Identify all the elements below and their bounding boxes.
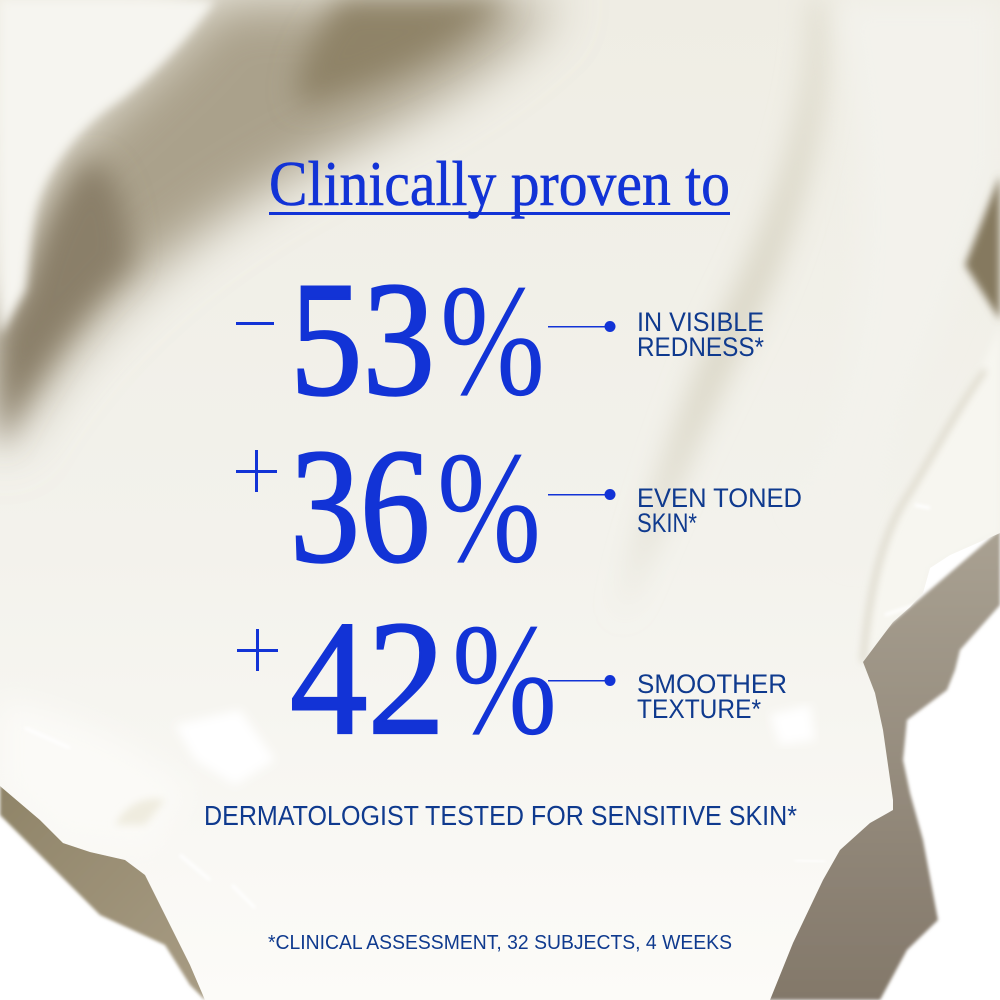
stat: plus 36 percent even toned skin: EVEN TONED [637,483,802,513]
title: Clinically proven to [269,148,730,219]
stat: plus 36 percent even toned skin: % [437,418,541,596]
stat: minus 53 percent in visible redness: % [440,251,545,429]
top right light fold [969,30,970,31]
stat: plus 42 percent smoother texture: TEXTURE* [637,694,761,724]
flap crease [863,370,985,662]
stat: minus 53 percent in visible redness [236,249,764,430]
shadow: lower left [0,780,210,1000]
shadow: right side [760,530,1000,1000]
stat: minus 53 percent in visible redness: IN VISIBLE [637,307,764,337]
stat: minus 53 percent in visible redness: REDNESS* [637,332,764,362]
top left flap [0,0,215,335]
stat: plus 36 percent even toned skin: SKIN* [637,508,697,538]
small fold [115,799,165,825]
subheading: dermatologist tested: DERMATOLOGIST TESTED FOR SENSITIVE SKIN* [204,800,797,831]
stat: minus 53 percent in visible redness: 53 [290,249,435,430]
stat: plus 42 percent smoother texture: % [452,590,557,768]
top right dark notch [965,175,1000,320]
stat: plus 36 percent even toned skin: 36 [290,416,430,597]
footnote: *CLINICAL ASSESSMENT, 32 SUBJECTS, 4 WEEKS [268,932,732,954]
right flap [868,626,890,654]
highlights [180,712,270,780]
stat: plus 42 percent smoother texture: SMOOTHER [637,669,787,699]
stat: plus 42 percent smoother texture [237,588,787,769]
shade: top left diagonal band [0,0,560,460]
lower left bright ridge [2,788,94,853]
stat: plus 36 percent even toned skin [236,416,802,597]
crease: long fold on the right [634,7,831,562]
stat: plus 42 percent smoother texture: 42 [290,588,445,769]
